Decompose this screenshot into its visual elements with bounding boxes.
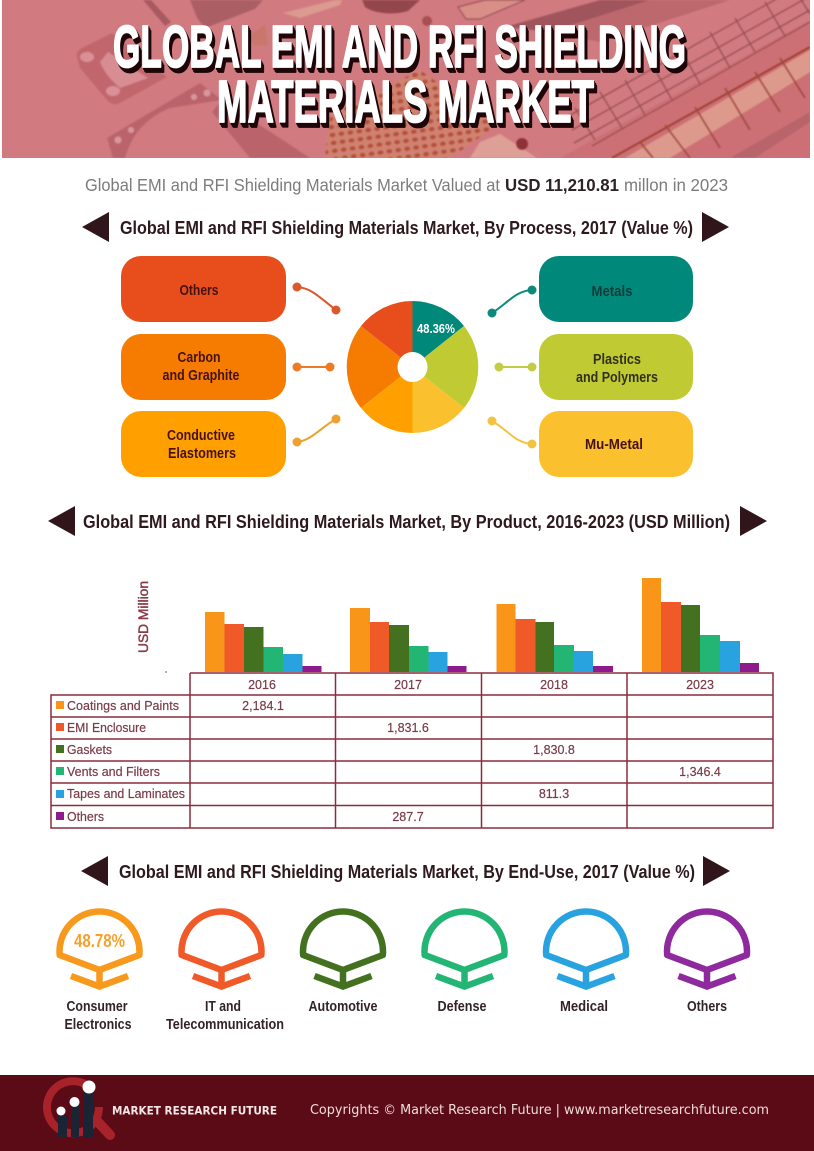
axis label: USD Million: USD Million xyxy=(136,581,151,653)
data table xyxy=(51,673,773,828)
row: gaskets: 1,830.8 xyxy=(533,743,575,757)
heading: by end-use xyxy=(81,856,730,886)
label: consumer electronics xyxy=(64,999,132,1033)
box: carbon and graphite: Carbon xyxy=(178,350,220,366)
box: conductive elastomers xyxy=(121,411,286,477)
pie chart: 48.36% xyxy=(417,322,455,336)
bars: 2023 xyxy=(642,578,759,672)
footer bar xyxy=(0,1075,814,1151)
copyright text: Copyrights © Market Research Future | www.marketresearchfuture.com xyxy=(310,1103,769,1118)
box: carbon and graphite: and Graphite xyxy=(162,368,240,384)
box: others xyxy=(121,256,286,322)
connector: carbon xyxy=(294,364,334,370)
bar chart xyxy=(205,578,759,672)
heading: by process: Global EMI and RFI Shielding Materials Market, By Process, 2017 (Value %) xyxy=(120,218,693,238)
label: automotive: Automotive xyxy=(308,999,378,1015)
table header years xyxy=(248,678,714,692)
connector: mu-metal xyxy=(488,418,536,448)
heading: by process xyxy=(82,212,729,242)
icon: automotive xyxy=(303,912,383,986)
strip lower right xyxy=(625,50,810,158)
row: tapes and laminates xyxy=(56,786,569,801)
row: coatings and paints: 2,184.1 xyxy=(242,699,284,713)
heading: by product: Global EMI and RFI Shielding Materials Market, By Product, 2016-2023 (USD Million) xyxy=(83,512,730,532)
heading: by product xyxy=(48,506,767,536)
icon: others xyxy=(667,912,747,986)
subtitle: market value: Global EMI and RFI Shielding Materials Market Valued at xyxy=(85,175,500,195)
box: metals: Metals xyxy=(592,284,632,300)
row: coatings and paints xyxy=(56,698,284,713)
label: others: Others xyxy=(687,999,727,1015)
pie chart xyxy=(347,301,478,433)
row: emi enclosure xyxy=(56,720,429,735)
subtitle: market value xyxy=(85,175,728,195)
box: metals xyxy=(539,256,693,322)
box: mu-metal: Mu-Metal xyxy=(585,437,643,453)
box: conductive elastomers: Conductive xyxy=(167,428,235,444)
subtitle: market value: millon in 2023 xyxy=(624,175,728,195)
row: emi enclosure: 1,831.6 xyxy=(387,721,429,735)
connector: plastics xyxy=(496,364,536,370)
row: tapes and laminates: Tapes and Laminates xyxy=(67,786,185,801)
row: gaskets xyxy=(56,742,575,757)
panel: process categories xyxy=(121,256,693,477)
heading: by end-use: Global EMI and RFI Shielding Materials Market, By End-Use, 2017 (Value %) xyxy=(119,862,695,882)
connector: metals xyxy=(488,286,536,316)
label: it and telecommunication xyxy=(166,999,284,1033)
icon: medical xyxy=(546,912,626,986)
connector: conductive xyxy=(294,416,340,446)
row: coatings and paints: Coatings and Paints xyxy=(67,698,179,713)
honeycomb mesh xyxy=(325,70,497,158)
table header years: 2016 xyxy=(248,678,276,692)
label: consumer electronics: Electronics xyxy=(64,1017,132,1033)
icon: consumer electronics xyxy=(60,912,140,986)
title text xyxy=(114,24,688,128)
icon: it and telecommunication xyxy=(182,912,262,986)
box: carbon and graphite xyxy=(121,334,286,400)
gasket top xyxy=(143,0,171,26)
box: plastics and polymers xyxy=(539,334,693,400)
box: conductive elastomers: Elastomers xyxy=(168,446,236,462)
label: consumer electronics: Consumer xyxy=(66,999,128,1015)
bars: 2018 xyxy=(496,604,613,672)
title text: MATERIALS MARKET xyxy=(217,69,594,135)
row: vents and filters: Vents and Filters xyxy=(67,764,160,779)
icon: defense xyxy=(425,912,504,986)
banner: header photo background xyxy=(2,0,810,158)
panel: end-use icons xyxy=(60,912,747,1033)
wire mesh right xyxy=(565,0,810,146)
row: vents and filters xyxy=(56,764,721,779)
box: plastics and polymers: and Polymers xyxy=(576,370,658,386)
icon: market research future logo xyxy=(47,1080,110,1137)
icon: consumer electronics: 48.78% xyxy=(74,931,125,951)
box: plastics and polymers: Plastics xyxy=(593,352,641,368)
row: others: 287.7 xyxy=(392,810,424,824)
row: tapes and laminates: 811.3 xyxy=(539,787,569,801)
row: vents and filters: 1,346.4 xyxy=(679,765,721,779)
subtitle: market value: USD 11,210.81 xyxy=(505,175,619,195)
gasket lower xyxy=(107,83,222,158)
table header years: 2017 xyxy=(394,678,422,692)
row: others xyxy=(56,809,424,824)
table header years: 2018 xyxy=(540,678,568,692)
row: others: Others xyxy=(67,809,104,824)
row: gaskets: Gaskets xyxy=(67,742,112,757)
bars: 2017 xyxy=(350,608,466,672)
label: it and telecommunication: Telecommunication xyxy=(166,1017,284,1033)
bars: 2016 xyxy=(205,612,322,672)
connector: others xyxy=(294,284,340,314)
label: medical: Medical xyxy=(560,999,608,1015)
label: it and telecommunication: IT and xyxy=(205,999,241,1015)
box: mu-metal xyxy=(539,411,693,477)
dark cylinder top xyxy=(362,0,420,13)
logo text: MARKET RESEARCH FUTURE xyxy=(112,1104,277,1118)
box: others: Others xyxy=(180,283,218,299)
row: emi enclosure: EMI Enclosure xyxy=(67,720,146,735)
gasket left xyxy=(77,33,167,104)
wire mesh top xyxy=(458,0,525,19)
table header years: 2023 xyxy=(686,678,714,692)
label: defense: Defense xyxy=(438,999,486,1015)
